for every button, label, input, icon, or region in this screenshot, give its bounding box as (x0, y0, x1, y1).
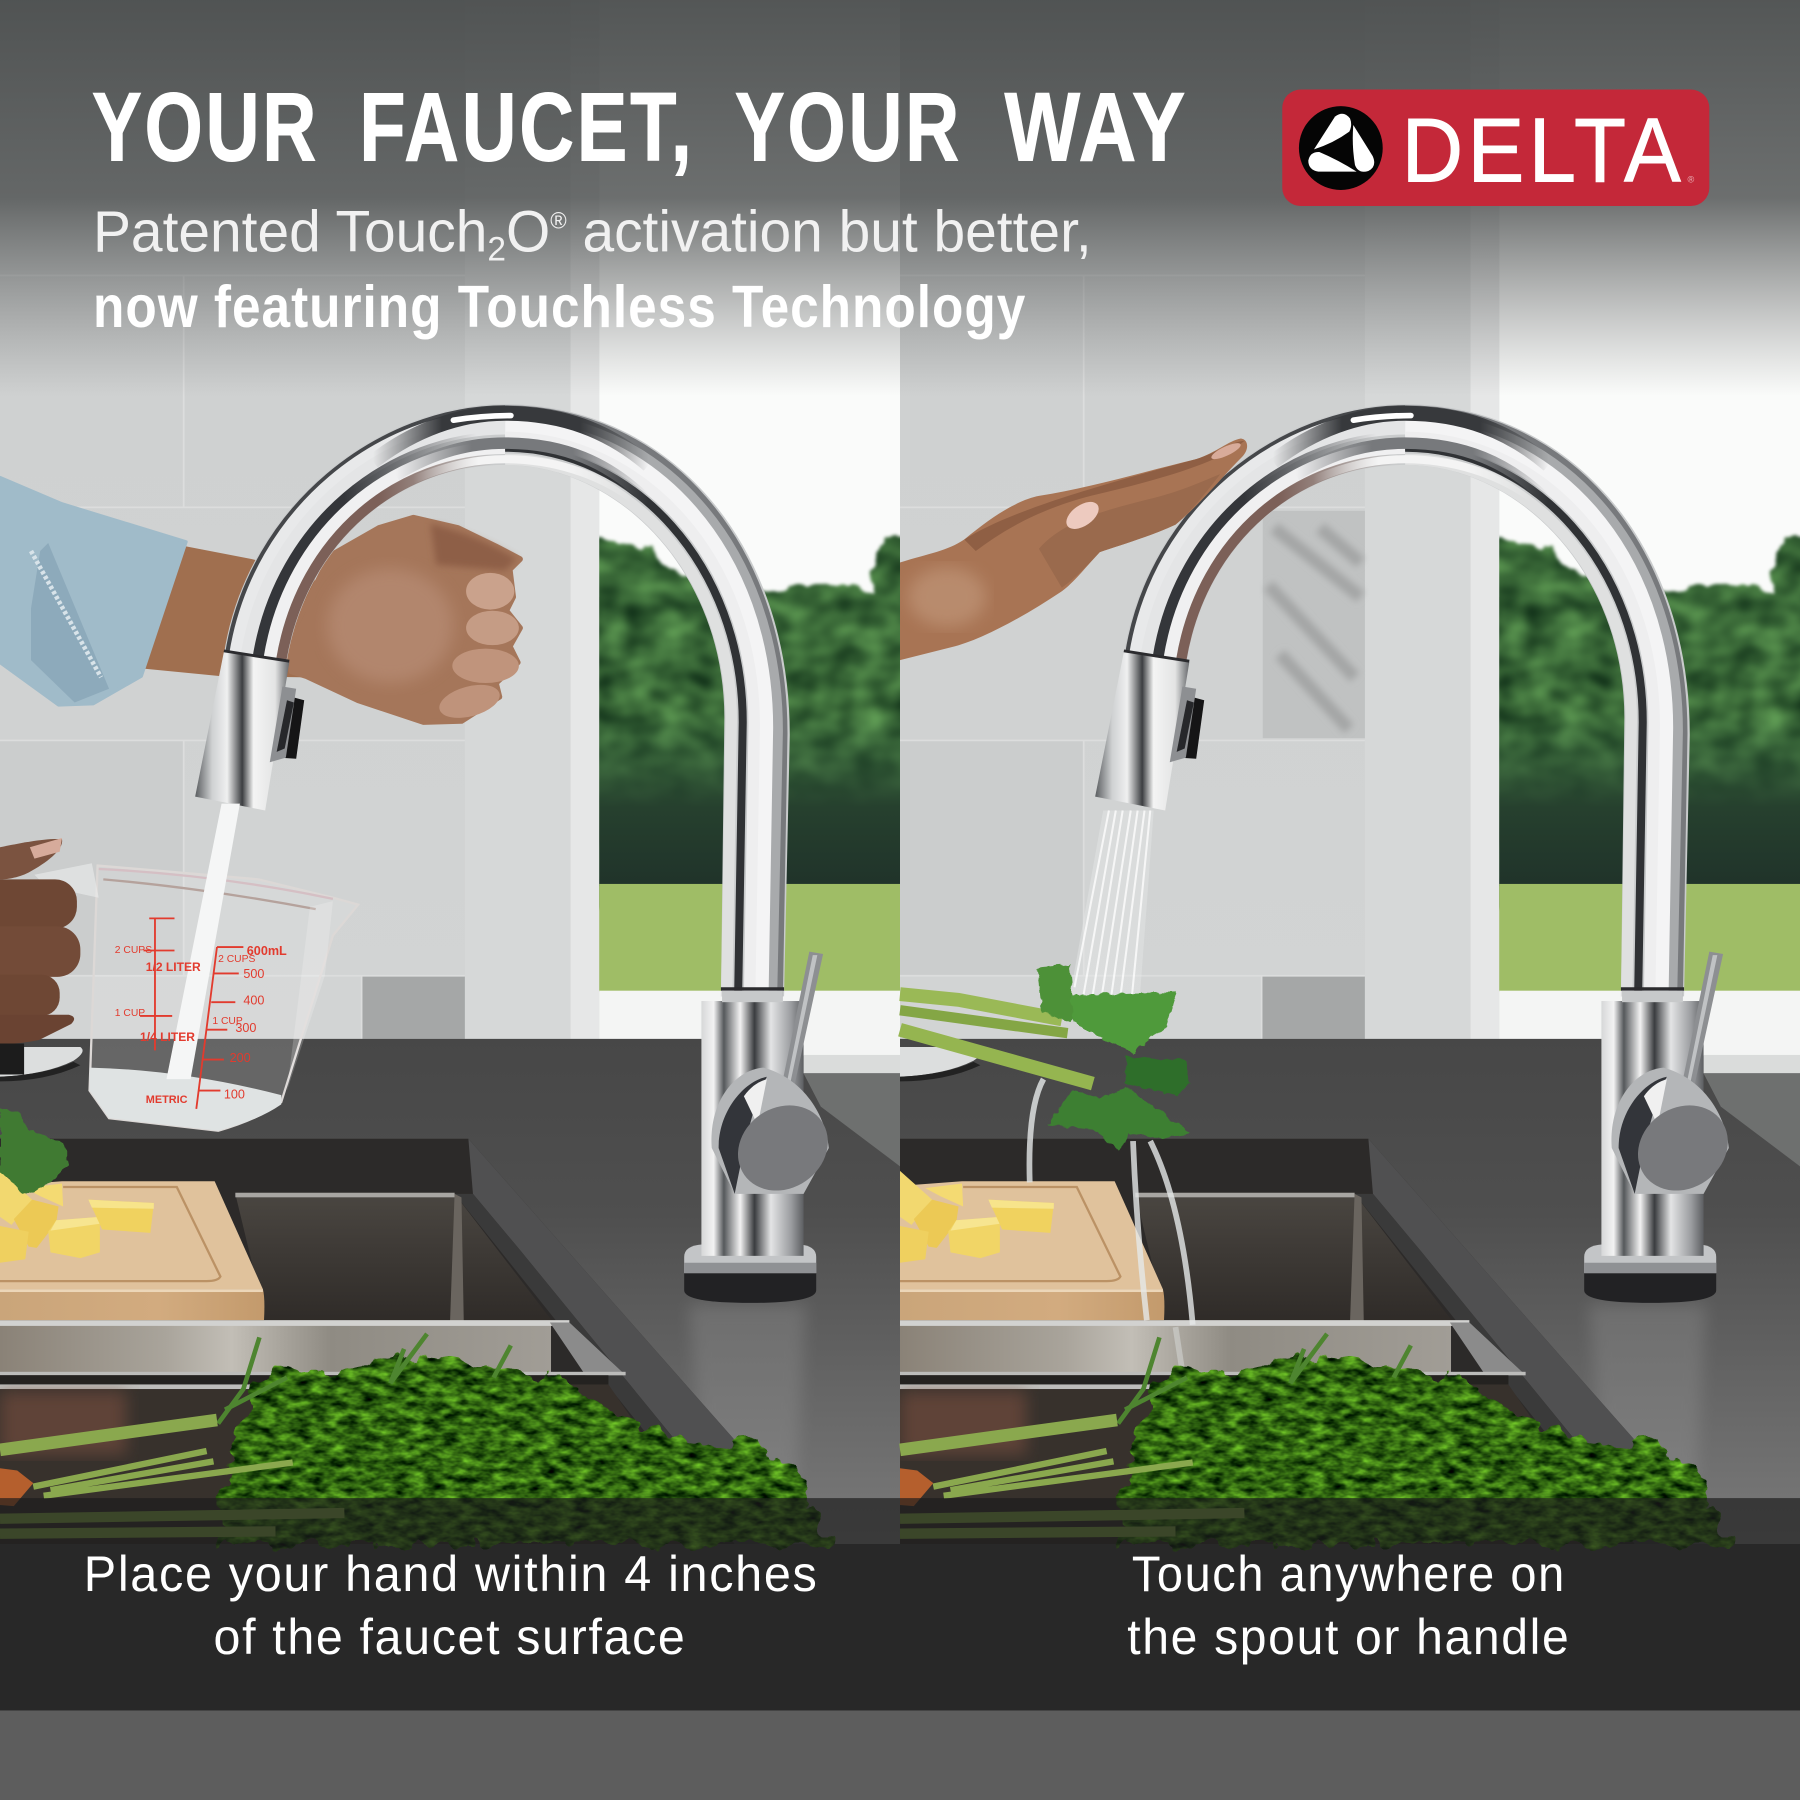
title: YOUR (92, 73, 319, 182)
measuring cup held by a hand, with water stream: 400 (243, 993, 264, 1007)
background: right panel photo (900, 0, 1800, 1544)
measuring cup held by a hand, with water stream: 100 (224, 1088, 245, 1102)
subtitle line one: activation but better, (567, 199, 1092, 264)
water drips (1029, 1079, 1193, 1372)
logo wordmark: DELTA (1402, 100, 1685, 201)
left arm with denim sleeve and fist (0, 478, 520, 724)
measuring cup held by a hand, with water stream (0, 804, 358, 1131)
subtitle line one: O (506, 199, 550, 264)
subtitle line one: Patented Touch (93, 199, 499, 264)
subtitle line one: ® (550, 207, 567, 233)
caption: right panel: Touch anywhere on (1132, 1545, 1566, 1602)
faucet: right panel (1095, 404, 1745, 1303)
marble tile in right panel (1263, 511, 1365, 738)
measuring cup held by a hand, with water stream: 1 CUP (212, 1016, 243, 1027)
measuring cup held by a hand, with water stream: 1/2 LITER (146, 960, 201, 974)
subtitle line two: now featuring Touchless Technology (93, 273, 1026, 340)
celery under running water (900, 964, 1190, 1150)
title: FAUCET, (359, 73, 695, 182)
bottom caption band (0, 1498, 1800, 1710)
title: YOUR (735, 73, 962, 182)
title: WAY (1004, 73, 1188, 182)
measuring cup held by a hand, with water stream: 300 (235, 1021, 256, 1035)
right carrot greens (900, 1334, 1729, 1544)
caption: right panel (1127, 1545, 1570, 1665)
measuring cup held by a hand, with water stream: 200 (230, 1051, 251, 1065)
caption: left panel (84, 1545, 818, 1665)
water spray (1070, 810, 1154, 996)
caption: left panel: Place your hand within 4 inches (84, 1545, 818, 1602)
left carrot greens (0, 1334, 829, 1544)
logo wordmark: ® (1688, 175, 1695, 185)
caption: left panel: of the faucet surface (214, 1608, 686, 1665)
hand touching the spout (900, 439, 1247, 660)
title (92, 73, 1188, 182)
subtitle line one: 2 (487, 231, 506, 269)
background: left panel photo (0, 0, 918, 1800)
measuring cup held by a hand, with water stream: 1 CUP (115, 1008, 145, 1019)
caption: right panel: the spout or handle (1127, 1608, 1570, 1665)
measuring cup held by a hand, with water stream: 500 (243, 967, 264, 981)
logo: Delta (1282, 90, 1709, 206)
top dark gradient overlay (0, 0, 1800, 396)
measuring cup held by a hand, with water stream: 600mL (247, 944, 287, 958)
logo mark: three petals (1308, 114, 1374, 172)
measuring cup held by a hand, with water stream: 2 CUPS (115, 945, 152, 956)
celery bunch on left cutting board (0, 1108, 69, 1194)
measuring cup held by a hand, with water stream: 1/4 LITER (140, 1030, 195, 1044)
measuring cup held by a hand, with water stream: METRIC (146, 1094, 188, 1106)
faucet: left panel (195, 404, 845, 1303)
measuring cup held by a hand, with water stream: 2 CUPS (218, 954, 256, 965)
